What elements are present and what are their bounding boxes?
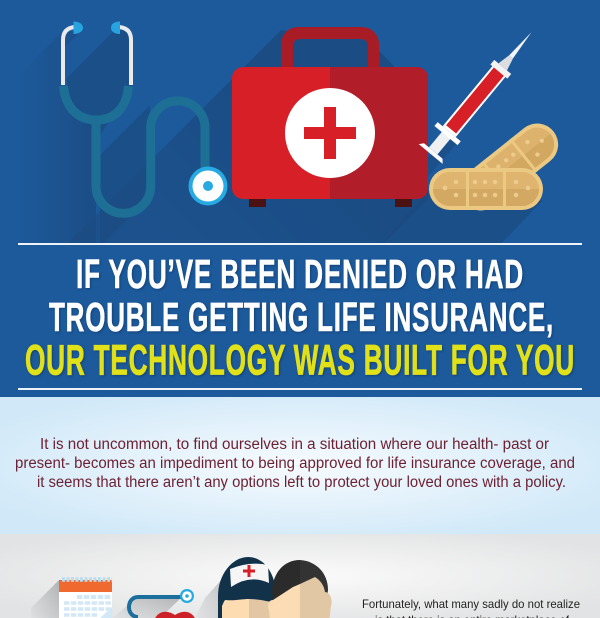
panel: intro text band	[0, 397, 600, 534]
intro paragraph	[15, 436, 575, 491]
icon: front bandage	[429, 168, 543, 210]
intro paragraph: It is not uncommon, to find ourselves in a situation where our health- past or	[40, 436, 549, 453]
title	[25, 251, 575, 384]
intro paragraph: present- becomes an impediment to being approved for life insurance coverage, and	[15, 455, 575, 472]
icon: nurse	[218, 557, 276, 618]
icon: first aid kit	[232, 27, 428, 207]
icon: small stethoscope and heart	[129, 589, 197, 618]
icon: stethoscope	[63, 22, 228, 213]
icon: man	[268, 560, 332, 618]
panel: blue hero header	[0, 0, 600, 397]
long shadows	[44, 30, 543, 243]
icon: calendar	[59, 580, 112, 618]
body text: Fortunately, what many sadly do not realize	[362, 597, 580, 611]
panel: grey marketplace section	[0, 534, 600, 618]
icon: syringe	[419, 22, 543, 164]
icon: rear bandage	[451, 115, 567, 219]
body text	[362, 600, 580, 618]
intro paragraph: it seems that there aren’t any options left to protect your loved ones with a policy.	[37, 474, 566, 491]
